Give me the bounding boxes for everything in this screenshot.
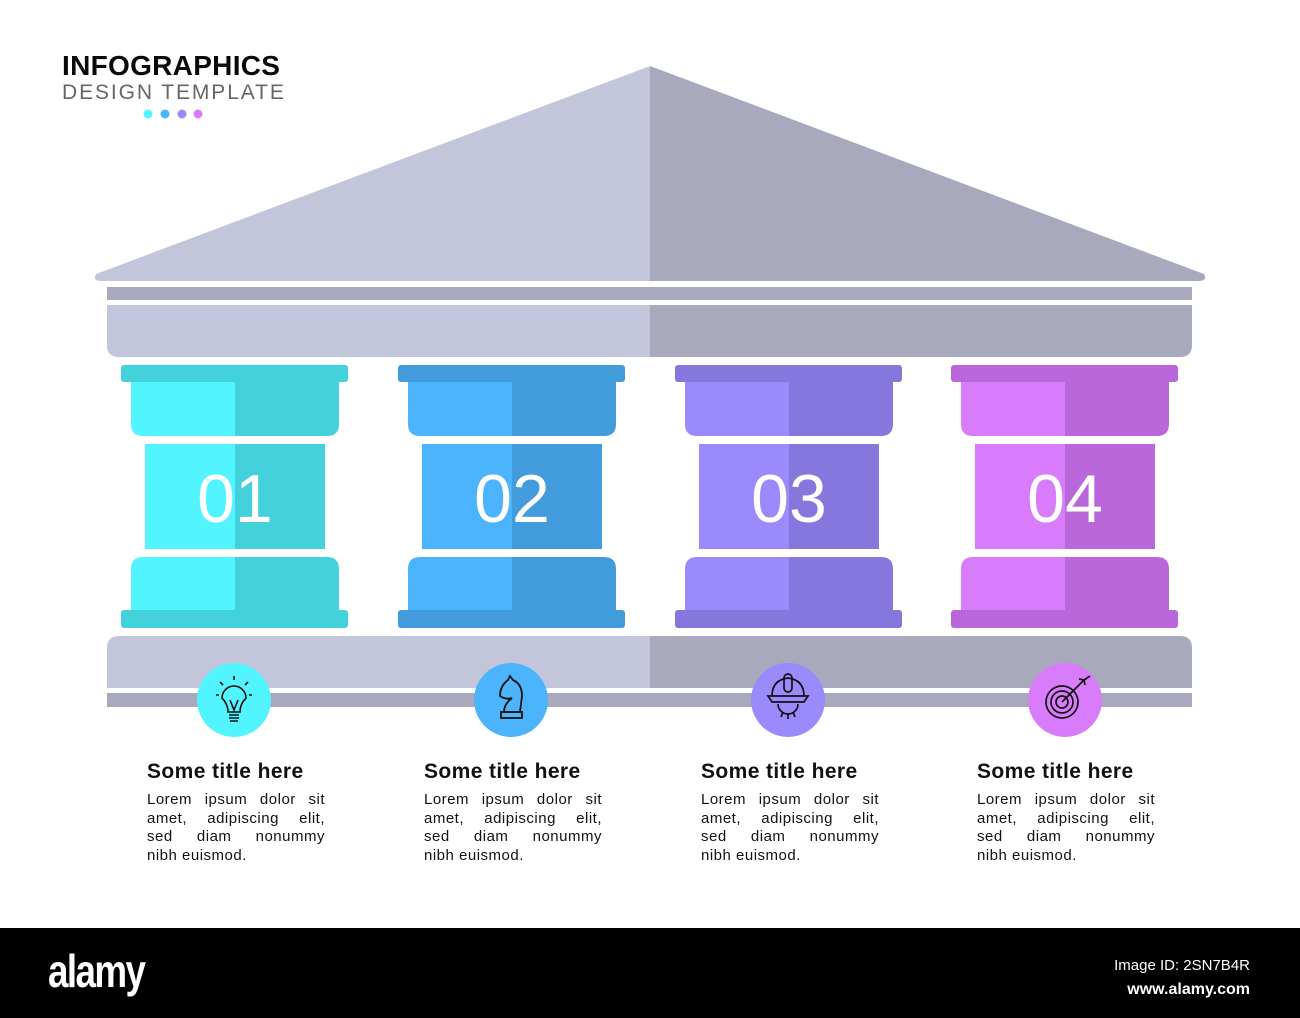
body 3: nibh euismod. [701,847,801,864]
dots [144,110,202,118]
body 2: amet, adipiscing elit, [424,810,602,827]
body 1: sed diam nonummy [147,828,325,845]
step 3 text [701,760,879,864]
icon: chess knight [474,663,548,737]
footer logo: alamy [48,945,144,997]
column 4 [951,365,1178,628]
step 1 text [147,760,325,864]
title 4: Some title here [977,760,1134,783]
roof [95,66,1205,281]
body 1: Lorem ipsum dolor sit [147,791,325,808]
footer id [1114,957,1250,998]
base [107,636,1192,707]
title 2: Some title here [424,760,581,783]
entablature [107,287,1192,357]
footer id: Image ID: 2SN7B4R [1114,957,1250,974]
icon: target [1028,663,1102,737]
column 2 [398,365,625,628]
footer bar [0,928,1300,1018]
body 4: Lorem ipsum dolor sit [977,791,1155,808]
body 4: nibh euismod. [977,847,1077,864]
number 04: 04 [1027,461,1103,537]
column 1 [121,365,348,628]
title 3: Some title here [701,760,858,783]
body 1: amet, adipiscing elit, [147,810,325,827]
body 3: amet, adipiscing elit, [701,810,879,827]
column 3 [675,365,902,628]
step 4 text [977,760,1155,864]
heading: INFOGRAPHICS [62,50,280,81]
body 1 [147,791,325,864]
number 03: 03 [751,461,827,537]
title block [62,50,286,118]
number 02: 02 [474,461,550,537]
body 2: Lorem ipsum dolor sit [424,791,602,808]
title 1: Some title here [147,760,304,783]
body 3: sed diam nonummy [701,828,879,845]
body 4: sed diam nonummy [977,828,1155,845]
body 3: Lorem ipsum dolor sit [701,791,879,808]
body 4 [977,791,1155,864]
step 2 text [424,760,602,864]
number 01: 01 [197,461,273,537]
icon: lightbulb [197,663,271,737]
body 1: nibh euismod. [147,847,247,864]
body 2: nibh euismod. [424,847,524,864]
icon: helmet gear [751,663,825,737]
body 3 [701,791,879,864]
body 4: amet, adipiscing elit, [977,810,1155,827]
footer id: www.alamy.com [1127,981,1250,998]
subheading: DESIGN TEMPLATE [62,81,286,104]
body 2 [424,791,602,864]
body 2: sed diam nonummy [424,828,602,845]
